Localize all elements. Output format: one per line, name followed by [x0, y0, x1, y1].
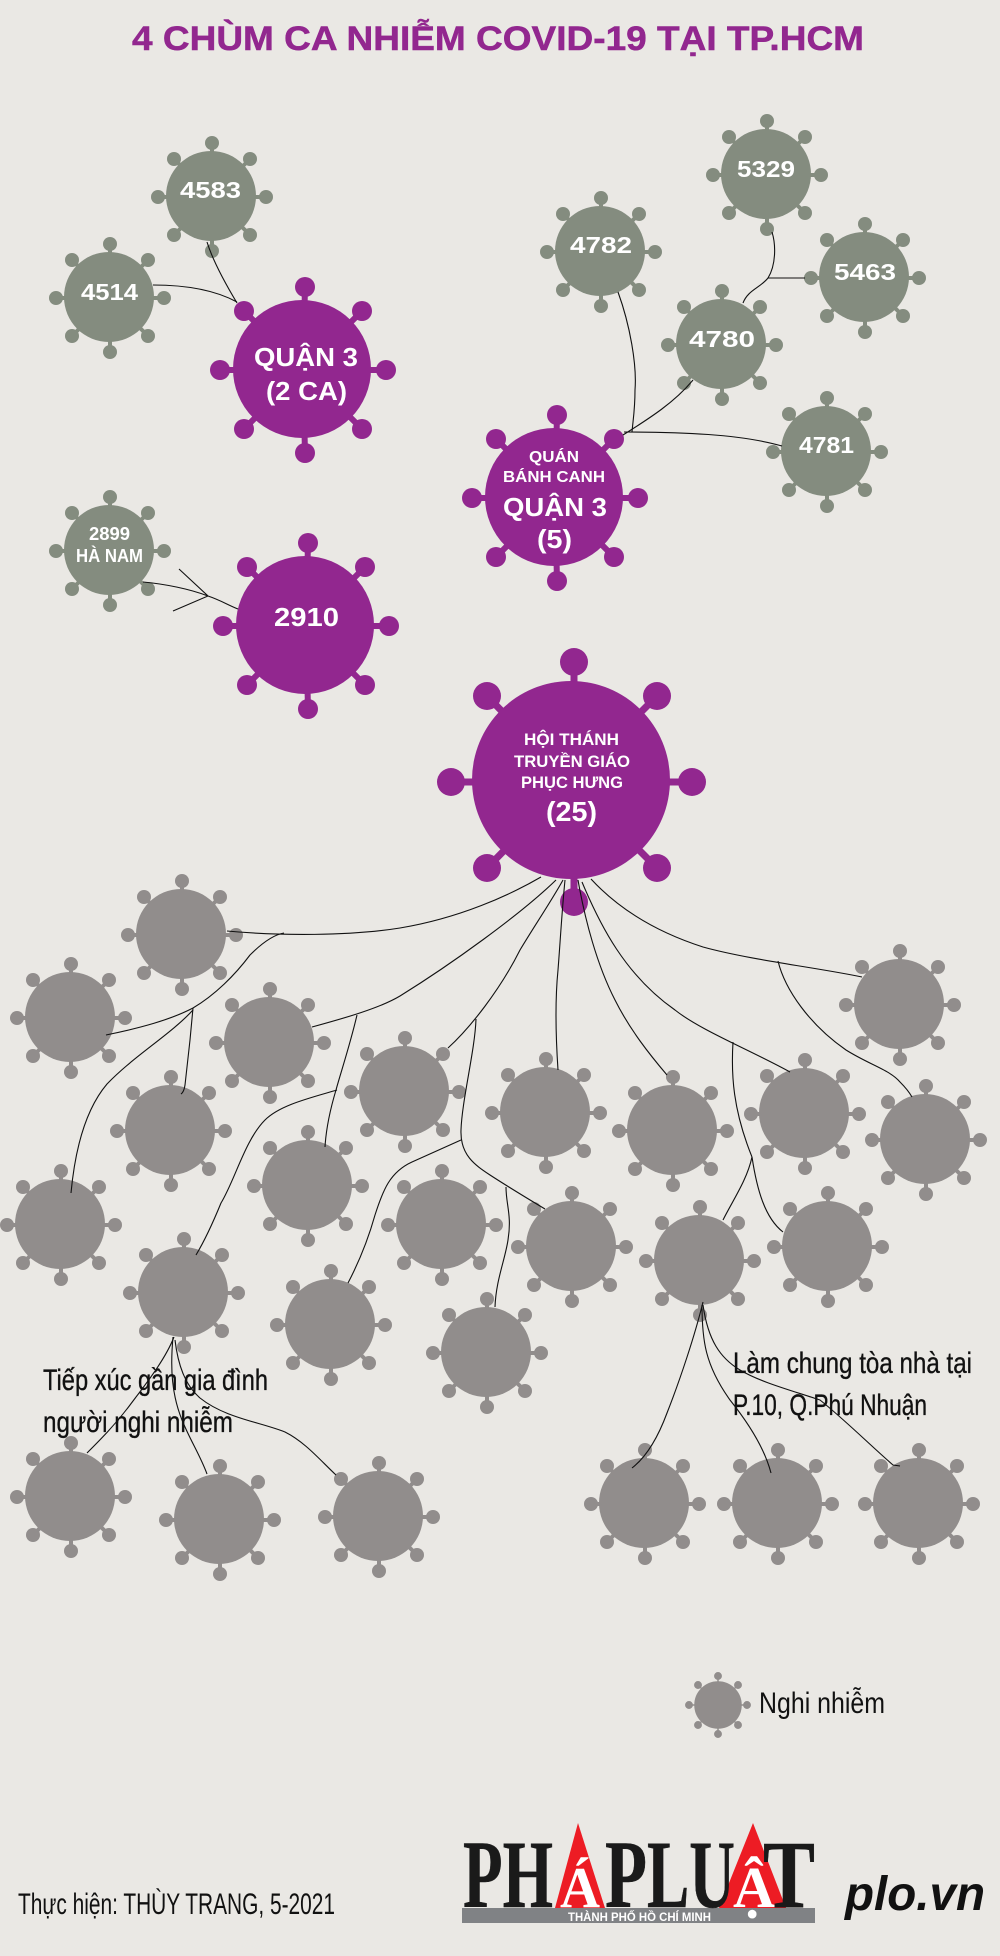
logo: Pháp Luật: [462, 1821, 815, 1928]
virus: case 4780: [661, 284, 783, 406]
virus: case 4781: [766, 391, 888, 513]
annotation: close contact: người nghi nhiễm: [43, 1406, 233, 1439]
virus: Quận 3 hub: QUẬN 3: [254, 342, 358, 372]
virus: Quán bánh canh hub: BÁNH CANH: [503, 467, 605, 486]
annotation: same building: P.10, Q.Phú Nhuận: [733, 1389, 927, 1422]
virus: case 4583: [151, 136, 273, 258]
virus: case 2899 Hà Nam: 2899: [89, 524, 130, 544]
virus: case 5329: [706, 114, 828, 236]
virus: case 2899 Hà Nam: HÀ NAM: [76, 545, 143, 566]
virus: case 2899 Hà Nam: [49, 490, 171, 612]
virus: case 4782: 4782: [570, 232, 632, 258]
cluster: 2910: [49, 490, 399, 719]
virus: Quán bánh canh hub: [462, 405, 648, 591]
virus: case 4583: 4583: [180, 177, 241, 203]
virus: Quận 3 hub: (2 CA): [266, 376, 347, 406]
connector: 4781 to hub: [624, 432, 782, 446]
logo: plo.vn: plo.vn: [843, 1868, 985, 1921]
annotation: close contact: Tiếp xúc gần gia đình: [43, 1364, 268, 1397]
connector: 5463 to 4780: [768, 277, 805, 279]
arrow: 2899 to 2910: [143, 569, 238, 611]
virus: case 2910: [213, 533, 399, 719]
cluster: Hội thánh Truyền giáo Phục Hưng: [0, 648, 987, 1581]
virus: case 2910: 2910: [274, 602, 339, 632]
virus: Quán bánh canh hub: QUẬN 3: [503, 492, 607, 522]
logo: Pháp Luật: LU: [647, 1821, 735, 1928]
cluster: Quận 3 (2 ca): [49, 136, 396, 463]
suspected cases: [0, 874, 987, 1581]
virus: Quán bánh canh hub: QUÁN: [529, 447, 579, 466]
virus: Hội thánh hub: PHỤC HƯNG: [521, 773, 623, 792]
virus: case 4780: 4780: [689, 326, 755, 352]
virus: Quận 3 hub: [210, 277, 396, 463]
virus: Hội thánh hub: (25): [546, 796, 597, 827]
connector: 4583 to Quận 3: [207, 242, 237, 303]
virus: case 5463: [804, 217, 926, 339]
logo: Pháp Luật: THÀNH PHỐ HỒ CHÍ MINH: [568, 1909, 711, 1924]
logo: Pháp Luật: T: [763, 1821, 815, 1928]
logo: Pháp Luật: Ậ: [733, 1855, 775, 1920]
legend: suspected: [686, 1673, 885, 1737]
logo: Pháp Luật: PH: [463, 1821, 553, 1928]
logo: Pháp Luật: P: [605, 1821, 647, 1928]
connector: 4782 to hub: [618, 292, 635, 432]
virus: Hội thánh hub: HỘI THÁNH: [524, 730, 619, 749]
virus: case 4514: [49, 237, 171, 359]
annotation: close contact: [43, 1364, 268, 1439]
logo: Pháp Luật: Á: [560, 1855, 600, 1920]
cluster: Quán bánh canh Quận 3: [462, 114, 926, 591]
virus: Hội thánh hub: [437, 648, 706, 916]
credit: Thực hiện: THÙY TRANG, 5-2021: [18, 1888, 335, 1921]
virus: Quán bánh canh hub: (5): [537, 524, 572, 554]
virus: case 5463: 5463: [834, 259, 896, 285]
connectors from hub to suspected cases: [71, 877, 912, 1475]
connector: 4514 to Quận 3: [153, 285, 237, 302]
title: 4 CHÙM CA NHIỄM COVID-19 TẠI TP.HCM: [132, 20, 864, 58]
virus: Hội thánh hub: TRUYỀN GIÁO: [514, 752, 630, 771]
connector: 4780 to hub: [623, 380, 693, 435]
virus: case 4781: 4781: [799, 432, 854, 458]
connector: 5329 to 4780: [743, 232, 775, 303]
virus: case 5329: 5329: [737, 156, 795, 182]
virus: case 4514: 4514: [81, 279, 138, 305]
virus: case 4782: [540, 191, 662, 313]
annotation: same building: [733, 1347, 972, 1422]
legend: suspected: Nghi nhiễm: [759, 1687, 885, 1720]
